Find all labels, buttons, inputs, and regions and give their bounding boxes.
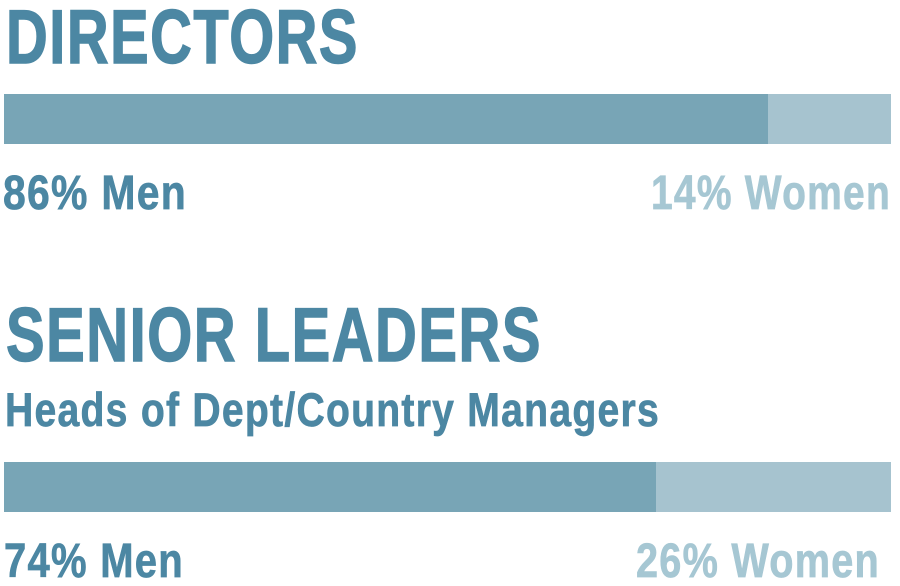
panel: directors <box>3 0 891 220</box>
bar segment: 14% women <box>768 94 891 144</box>
bar segment: 74% men <box>4 462 656 512</box>
bar segment: 26% women <box>656 462 891 512</box>
heading: senior leaders: SENIOR LEADERS <box>6 293 542 378</box>
label: 86% men: 86% Men <box>3 167 187 220</box>
panel: senior leaders <box>4 293 891 586</box>
subheading: heads of dept/country managers: Heads of Dept/Country Managers <box>5 383 660 436</box>
bar segment: 86% men <box>4 94 768 144</box>
bar chart: directors 86/14 <box>4 94 891 144</box>
bar chart: senior leaders 74/26 <box>4 462 891 512</box>
